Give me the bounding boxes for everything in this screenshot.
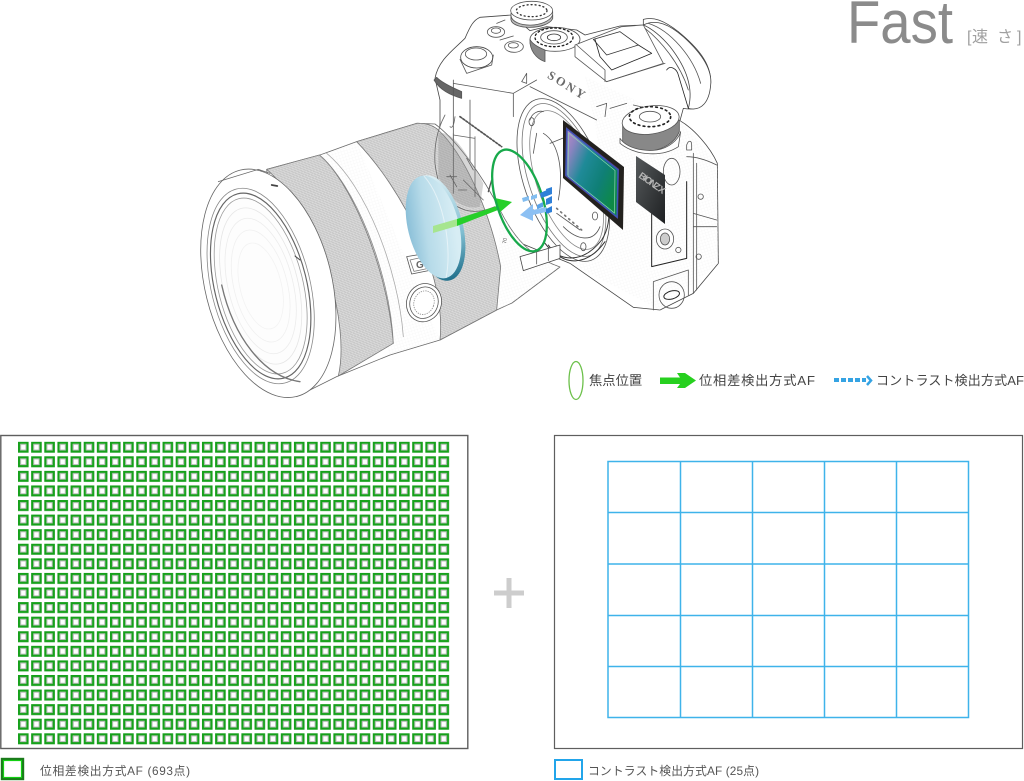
lens line art [179,115,560,412]
G badge: G [416,260,424,271]
25-point blue grid [608,462,968,718]
caption: phase detection AF key: 位相差検出方式AF (693点) [40,764,190,778]
legend: focus position [569,362,642,400]
panel: phase detection AF points [1,436,468,748]
plus sign [494,578,524,608]
camera body line art [434,1,718,310]
grip buttons [434,20,597,213]
legend: focus position: 焦点位置 [589,373,642,388]
panel: contrast detection AF points [554,436,1022,748]
title: Fast [847,0,1021,56]
lens element disc [396,169,475,287]
BIONZ X processor chip: BIONZ X [636,170,668,197]
body fine shading [570,77,718,310]
focus position ellipse [481,143,558,258]
G badge [407,253,432,274]
focal length marks: 70 [502,237,509,244]
translucent grip overlay [435,115,502,211]
title: Fast: ] [1017,29,1021,46]
hot shoe and prism [575,25,665,82]
hood and glass [179,155,358,412]
title: Fast: 速さ [972,28,1013,46]
lens mount [498,87,628,273]
legend: contrast detection AF: コントラスト検出方式AF [876,373,1024,388]
barrel [267,123,560,397]
image sensor [563,120,624,230]
top right dial [620,102,681,154]
caption: contrast detection AF key: コントラスト検出方式AF (25点) [588,764,759,778]
BIONZ X processor chip [636,156,668,224]
body silhouette [435,15,718,310]
phase detection arrow [433,198,512,233]
label: SONY: SONY [545,68,588,102]
right side body details [597,103,717,310]
focus hold button [401,279,447,327]
zoom ring hatch [267,155,393,376]
contrast detection blue points and arrow [520,187,552,221]
top dial left [511,1,553,27]
legend: phase detection AF: 位相差検出方式AF [699,373,815,388]
caption: phase detection AF key [2,759,190,779]
top dial right [530,27,580,62]
lens switch [520,245,560,271]
caption: contrast detection AF key [555,760,759,779]
focus ring hatch [357,123,501,340]
693-point green grid [18,442,450,745]
eyepiece [643,22,711,109]
lens ring edge lines [319,155,393,343]
title: Fast: [ [967,29,972,46]
